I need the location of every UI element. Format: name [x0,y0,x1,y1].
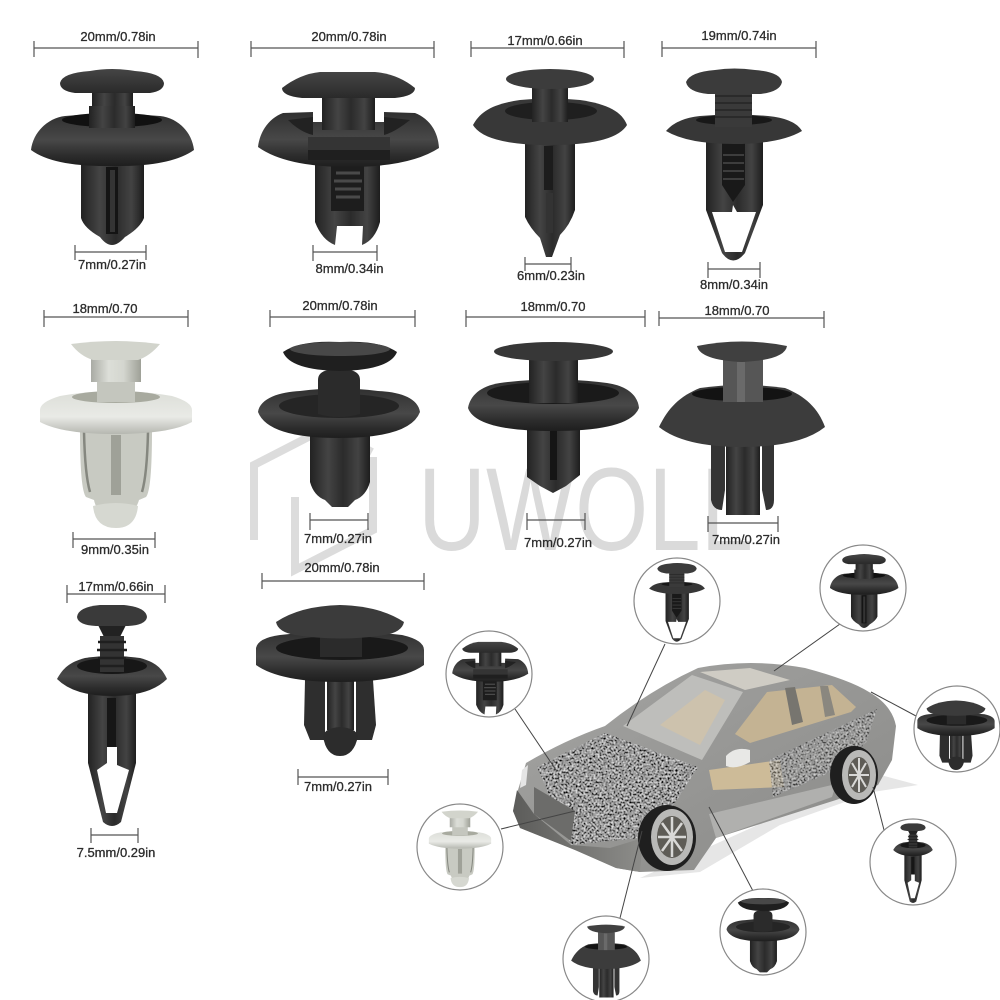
watermark: UWOLL logo and wordmark: UWOLL [418,444,753,576]
clip 4: threaded with open fork [666,68,802,260]
dimensions: clip 10: 7mm/0.27in [304,779,372,794]
dimensions: clip 6: 7mm/0.27in [304,531,372,546]
dimensions: clip 5 [44,301,188,557]
dimensions: clip 7: 18mm/0.70 [520,299,586,314]
dimensions: clip 1: 7mm/0.27in [78,257,146,272]
dimensions: clip 4 [662,28,816,292]
dimensions: clip 2 [251,29,434,276]
watermark: UWOLL logo and wordmark [254,428,753,576]
dimensions: clip 3: 6mm/0.23in [517,268,585,283]
callout circle: round head clip [820,545,906,631]
dimensions: clip 5: 18mm/0.70 [72,301,138,316]
dimensions: clip 4: 19mm/0.74in [701,28,777,43]
car cutaway illustration [513,663,918,878]
door sill [709,784,836,838]
dimensions: clip 7: 7mm/0.27in [524,535,592,550]
dimensions: clip 9 [67,579,165,860]
dimensions: clip 3 [471,33,624,283]
clip 5: white plastic clip [40,341,192,528]
roof and windshield glass [623,675,743,760]
dimensions: clip 8 [659,303,824,547]
clip 3: textured flange with pointed tip [473,69,627,257]
callout circle: flat head spring clip [446,631,532,717]
dimensions: clip 5: 9mm/0.35in [81,542,149,557]
dimensions: clip 10 [262,560,424,794]
dimensions: clip 4: 8mm/0.34in [700,277,768,292]
dimensions: clip 6: 20mm/0.78in [302,298,378,313]
dimensions: clip 1 [34,29,198,272]
dimensions: clip 7 [466,299,645,550]
callout circle: ring flange clip [720,889,806,975]
side mirror [726,749,750,767]
dimensions: clip 6 [270,298,415,546]
clip 2: flat head with front block and spring [258,72,439,245]
dimensions: clip 8: 7mm/0.27in [712,532,780,547]
callout circle: dome clip [563,916,649,1000]
headlight [520,765,528,788]
clip 10: textured flat head with three legs [256,605,424,756]
front wheel [638,805,696,871]
clip 6: mushroom head, ring flange [258,342,420,507]
callout circle: white clip [417,804,503,890]
car body [513,663,896,872]
dimensions: clip 1: 20mm/0.78in [80,29,156,44]
dimensions: clip 2: 8mm/0.34in [316,261,383,276]
dimensions: clip 8: 18mm/0.70 [704,303,770,318]
callout circle: textured flat head clip [914,686,1000,772]
car shadow [640,773,918,878]
callout circle: long fork clip [870,819,956,905]
clip 8: textured dome with open legs [659,342,825,515]
clip 1: round head, smooth flange [31,69,194,245]
clip 9: screw head with long fork [57,605,167,826]
leader lines [501,624,916,918]
dimensions: clip 9: 7.5mm/0.29in [77,845,155,860]
front bumper [513,790,643,872]
dimensions: clip 2: 20mm/0.78in [311,29,387,44]
rear mechanicals [769,709,877,797]
seats [709,760,784,790]
clip 7: wide cap, deep ring flange [468,342,639,493]
dimensions: clip 3: 17mm/0.66in [507,33,583,48]
grille [534,787,575,841]
dimensions: clip 9: 17mm/0.66in [78,579,154,594]
callout circle: fork clip [634,558,720,644]
dimensions: clip 10: 20mm/0.78in [304,560,380,575]
rear wheel [830,746,878,804]
engine bay [535,730,700,848]
side windows and interior [735,685,856,743]
